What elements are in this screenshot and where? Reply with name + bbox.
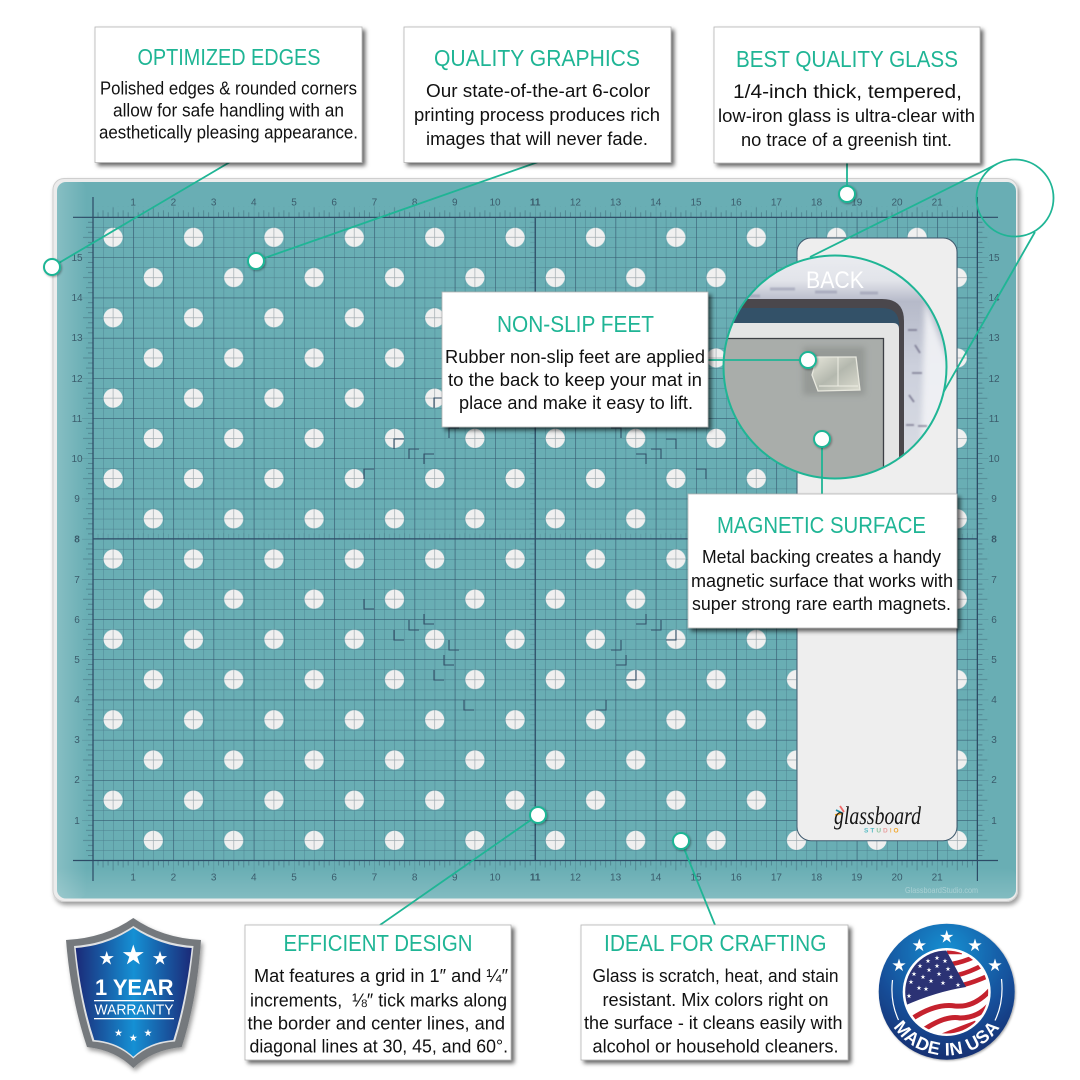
left scale numbers: 4 — [74, 695, 80, 706]
right scale numbers: 1 — [991, 816, 997, 827]
top scale numbers: 4 — [251, 198, 257, 208]
body text — [718, 81, 975, 150]
callout: efficient design — [245, 925, 511, 1060]
bottom scale numbers: 4 — [251, 872, 257, 884]
top scale numbers — [130, 198, 943, 208]
warranty text: WARRANTY — [94, 1002, 174, 1018]
body text: alcohol or household cleaners. — [592, 1036, 838, 1056]
right scale numbers: 8 — [991, 534, 997, 546]
body text: increments, ⅛″ tick marks along — [250, 990, 507, 1010]
body text: Our state-of-the-art 6-color — [426, 81, 650, 101]
left scale numbers: 2 — [74, 775, 80, 786]
top scale numbers: 5 — [291, 198, 297, 208]
bottom scale numbers: 2 — [171, 872, 177, 884]
bottom scale numbers: 16 — [731, 872, 742, 884]
top scale numbers: 10 — [489, 198, 501, 208]
logo: glassboard studio: STUDIO — [864, 828, 901, 834]
left scale numbers: 12 — [71, 374, 83, 385]
body text: diagonal lines at 30, 45, and 60°. — [250, 1036, 508, 1056]
website text: GlassboardStudio.com — [905, 886, 978, 895]
body text: magnetic surface that works with — [691, 571, 953, 591]
body text: 1/4-inch thick, tempered, — [733, 81, 962, 103]
right scale numbers: 13 — [988, 333, 1000, 344]
right scale numbers — [988, 253, 1000, 827]
body text — [248, 966, 509, 1056]
bottom scale numbers: 7 — [372, 872, 378, 884]
body text — [691, 547, 953, 614]
body text: allow for safe handling with an — [113, 100, 344, 120]
left scale numbers: 14 — [71, 293, 83, 304]
right scale numbers: 15 — [988, 253, 1000, 264]
callout: best quality glass — [714, 27, 980, 163]
teal mat surface — [57, 182, 1016, 898]
body text: place and make it easy to lift. — [459, 393, 693, 413]
heading: MAGNETIC SURFACE — [717, 512, 926, 538]
bottom scale numbers: 20 — [891, 872, 903, 884]
top scale numbers: 21 — [932, 198, 943, 208]
heading: QUALITY GRAPHICS — [434, 45, 640, 71]
left scale numbers: 8 — [74, 534, 80, 546]
bottom scale numbers: 3 — [211, 872, 217, 884]
body text: low-iron glass is ultra-clear with — [718, 106, 975, 126]
panel: white blank area with logo — [797, 238, 957, 841]
left scale numbers: 9 — [74, 494, 80, 505]
warranty text — [94, 975, 174, 1019]
bottom scale numbers: 10 — [489, 872, 501, 884]
lens connector lines — [810, 164, 1035, 393]
bottom scale numbers: 9 — [452, 872, 458, 884]
bottom scale numbers: 8 — [412, 872, 418, 884]
left scale numbers: 6 — [74, 615, 80, 626]
right scale numbers: 2 — [991, 775, 997, 786]
body text — [584, 966, 842, 1056]
body text: to the back to keep your mat in — [448, 370, 702, 390]
stars — [100, 944, 167, 1041]
heading: NON-SLIP FEET — [497, 311, 654, 337]
right scale numbers: 6 — [991, 615, 997, 626]
stars — [892, 930, 1002, 971]
white arcs — [892, 979, 1002, 1020]
top scale numbers: 6 — [331, 198, 337, 208]
left scale numbers: 7 — [74, 575, 80, 586]
top scale numbers: 14 — [650, 198, 662, 208]
top scale numbers: 17 — [771, 198, 782, 208]
left scale numbers — [71, 253, 83, 827]
bottom scale numbers: 13 — [610, 872, 622, 884]
callout: quality graphics — [404, 27, 671, 162]
body text — [445, 347, 705, 413]
logo: glassboard studio: glassboard — [834, 803, 921, 830]
top scale numbers: 16 — [731, 198, 742, 208]
diagonal corner marks — [364, 398, 706, 710]
callout marker dots — [44, 186, 855, 849]
body text: images that will never fade. — [426, 129, 648, 149]
top scale numbers: 18 — [811, 198, 823, 208]
top scale numbers: 19 — [851, 198, 863, 208]
right scale numbers: 7 — [991, 575, 997, 586]
right scale numbers: 11 — [989, 414, 1000, 425]
badge: made in usa: MADE IN USA — [894, 1020, 1000, 1056]
bottom scale numbers: 12 — [570, 872, 581, 884]
panel: cutting mat — [53, 178, 1018, 902]
body text: Glass is scratch, heat, and stain — [592, 966, 838, 986]
top scale numbers: 2 — [171, 198, 177, 208]
callout: non-slip feet — [442, 292, 708, 427]
bottom scale numbers: 5 — [291, 872, 297, 884]
left scale numbers: 5 — [74, 655, 80, 666]
body text: the surface - it cleans easily with — [584, 1013, 842, 1033]
left scale numbers: 10 — [71, 454, 83, 465]
icon: rubber foot — [803, 347, 865, 395]
border rulers — [73, 197, 998, 881]
top scale numbers: 8 — [412, 198, 418, 208]
curved text — [896, 1030, 997, 1055]
bottom scale numbers: 18 — [811, 872, 823, 884]
body text: super strong rare earth magnets. — [692, 594, 951, 614]
top scale numbers: 15 — [690, 198, 702, 208]
right scale numbers: 4 — [991, 695, 997, 706]
body text: Metal backing creates a handy — [702, 547, 941, 567]
body text: Polished edges & rounded corners — [100, 78, 357, 98]
top scale numbers: 9 — [452, 198, 458, 208]
callout: ideal for crafting — [581, 925, 848, 1060]
top scale numbers: 3 — [211, 198, 217, 208]
body text — [414, 81, 660, 149]
bottom scale numbers: 6 — [331, 872, 337, 884]
top scale numbers: 11 — [530, 198, 541, 208]
left scale numbers: 11 — [72, 414, 83, 425]
small corner magnifier circle — [976, 160, 1054, 236]
top scale numbers: 7 — [372, 198, 378, 208]
body text: aesthetically pleasing appearance. — [99, 122, 358, 142]
body text — [99, 78, 358, 142]
bottom scale numbers: 1 — [130, 872, 136, 884]
top scale numbers: 12 — [570, 198, 581, 208]
heading: IDEAL FOR CRAFTING — [604, 930, 826, 956]
right scale numbers: 14 — [988, 293, 1000, 304]
magnified photo: back of mat — [720, 250, 955, 485]
left scale numbers: 15 — [71, 253, 83, 264]
label: back: BACK — [806, 267, 864, 294]
bottom scale numbers: 19 — [851, 872, 863, 884]
left scale numbers: 1 — [74, 816, 80, 827]
top scale numbers: 20 — [891, 198, 903, 208]
heading: BEST QUALITY GLASS — [736, 46, 958, 72]
right scale numbers: 10 — [988, 454, 1000, 465]
quarter inch and inch grid — [93, 217, 977, 861]
glass edge frame — [53, 178, 1018, 902]
white dots — [93, 217, 977, 861]
right scale numbers: 3 — [991, 735, 997, 746]
right scale numbers: 9 — [991, 494, 997, 505]
badge: made in usa — [878, 924, 1017, 1062]
top scale numbers: 13 — [610, 198, 622, 208]
left scale numbers: 3 — [74, 735, 80, 746]
bottom scale numbers: 21 — [932, 872, 943, 884]
right scale numbers: 5 — [991, 655, 997, 666]
body text: Rubber non-slip feet are applied — [445, 347, 705, 367]
top scale numbers: 1 — [130, 198, 136, 208]
callout: magnetic surface — [688, 494, 957, 628]
body text: no trace of a greenish tint. — [741, 130, 952, 150]
callout: optimized edges — [95, 27, 362, 162]
bottom scale numbers: 11 — [530, 872, 541, 884]
body text: printing process produces rich — [414, 105, 660, 125]
callout lines — [52, 162, 847, 925]
body text: the border and center lines, and — [248, 1014, 505, 1034]
bottom scale numbers: 17 — [771, 872, 782, 884]
flag — [902, 948, 991, 1036]
heading: OPTIMIZED EDGES — [138, 44, 320, 70]
warranty text: 1 YEAR — [95, 975, 174, 1000]
body text: Mat features a grid in 1″ and ¼″ — [254, 966, 509, 986]
body text: resistant. Mix colors right on — [602, 990, 828, 1010]
left scale numbers: 13 — [71, 333, 83, 344]
bottom scale numbers: 15 — [690, 872, 702, 884]
bottom scale numbers — [130, 872, 943, 884]
heading: EFFICIENT DESIGN — [284, 930, 472, 956]
bottom scale numbers: 14 — [650, 872, 662, 884]
right scale numbers: 12 — [988, 374, 1000, 385]
badge: 1 year warranty — [66, 918, 201, 1068]
